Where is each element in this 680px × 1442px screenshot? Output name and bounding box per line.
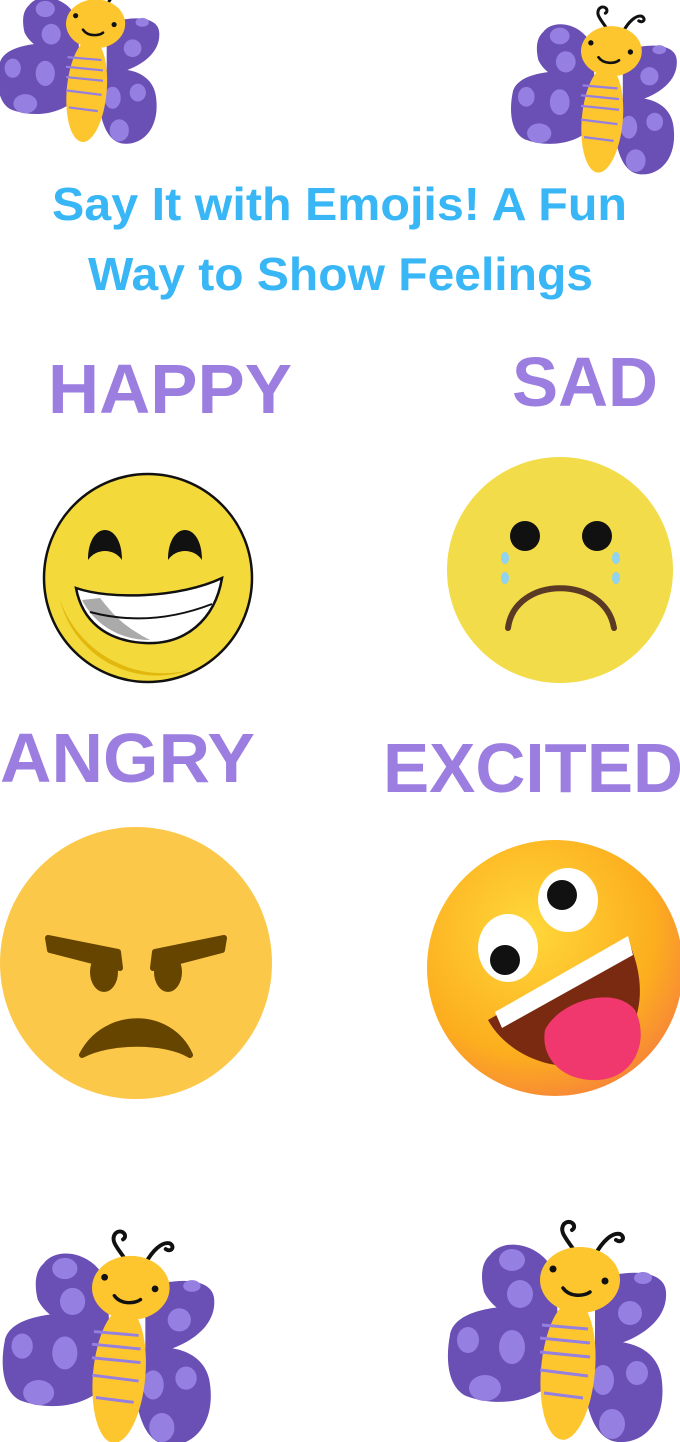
butterfly: top left bbox=[0, 0, 159, 144]
label: sad: SAD bbox=[512, 343, 658, 421]
emoji: excited bbox=[427, 840, 680, 1096]
label: excited: EXCITED bbox=[383, 729, 680, 807]
butterfly: bottom left bbox=[3, 1231, 214, 1442]
butterfly: top right bbox=[511, 7, 677, 174]
label: happy: HAPPY bbox=[48, 350, 292, 428]
emoji: happy bbox=[44, 474, 252, 682]
title: Way to Show Feelings bbox=[88, 248, 593, 300]
label: angry: ANGRY bbox=[0, 719, 255, 797]
butterfly: bottom right bbox=[448, 1222, 666, 1442]
title: Say It with Emojis! A Fun bbox=[52, 178, 627, 230]
emoji: sad bbox=[447, 457, 673, 683]
title bbox=[52, 178, 627, 300]
emoji: angry bbox=[0, 827, 272, 1099]
